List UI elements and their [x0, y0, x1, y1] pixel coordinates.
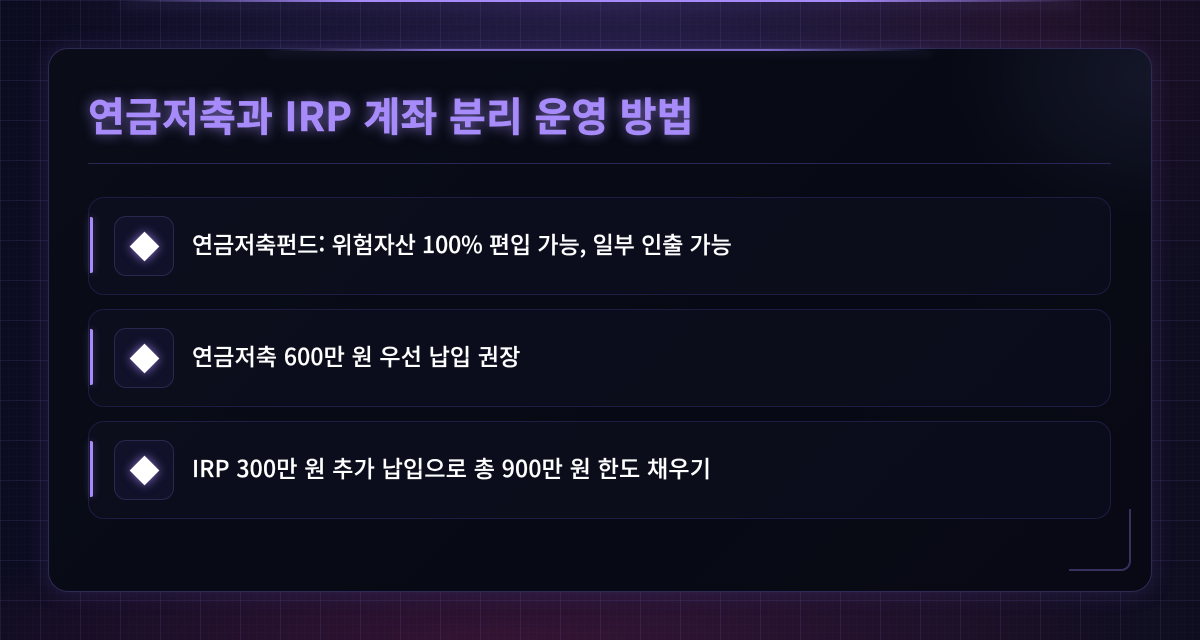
accent bar 3: [90, 441, 93, 497]
card top highlight bar: [268, 49, 932, 51]
top glow bar: [120, 0, 1080, 2]
icon: diamond 1: [114, 216, 174, 276]
accent bar 2: [90, 329, 93, 385]
icon: diamond 3: [114, 440, 174, 500]
title: 연금저축과 IRP 계좌 분리 운영 방법: [88, 85, 694, 143]
corner bracket: [1069, 509, 1131, 571]
panel: main card: [48, 48, 1152, 592]
icon: diamond 2: [114, 328, 174, 388]
item text 1: 연금저축펀드: 위험자산 100% 편입 가능, 일부 인출 가능: [192, 226, 732, 260]
item text 2: 연금저축 600만 원 우선 납입 권장: [192, 338, 520, 372]
list item 1: [88, 197, 1111, 295]
accent bar 1: [90, 217, 93, 273]
list item 3: [88, 421, 1111, 519]
list item 2: [88, 309, 1111, 407]
item text 3: IRP 300만 원 추가 납입으로 총 900만 원 한도 채우기: [192, 450, 711, 484]
